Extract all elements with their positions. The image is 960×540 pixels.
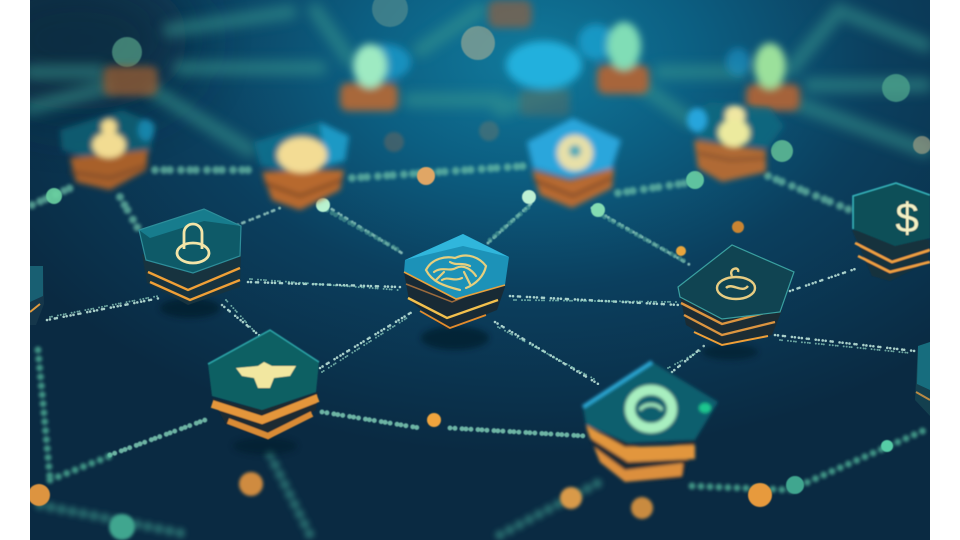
token: far glowing bell [578,22,649,94]
ornate emblem [426,256,486,290]
token: far blue hexagon [506,41,582,116]
token: green ring [583,362,718,482]
cross-shaped icon [236,362,296,388]
second row tokens [60,102,784,210]
token: centre ornate [404,234,509,350]
far row tokens [103,0,800,116]
token: second row left [254,122,349,210]
token: second row centre blue [527,118,621,208]
token: far glowing lock [340,44,411,111]
token: dollar [852,183,930,281]
token: far top left [103,66,158,96]
token: padlock [139,209,241,318]
token: left edge partial [30,266,44,325]
dollar sign: $ [895,194,919,241]
token: right edge partial [915,342,930,416]
page margins [0,0,30,540]
distant blurred connections [30,10,925,150]
gauge icon [717,269,755,299]
foreground sparkling connections [38,268,925,535]
padlock icon [177,224,209,263]
mid-distance blurred dotted connections [32,166,850,265]
token: second row right [686,102,784,182]
token: gauge emblem [678,245,794,360]
token: far right lock [726,43,800,111]
token: far top centre [488,0,532,28]
token: second row far left [60,110,156,190]
token: pale cross emblem [208,330,319,455]
ring icon [630,390,672,428]
